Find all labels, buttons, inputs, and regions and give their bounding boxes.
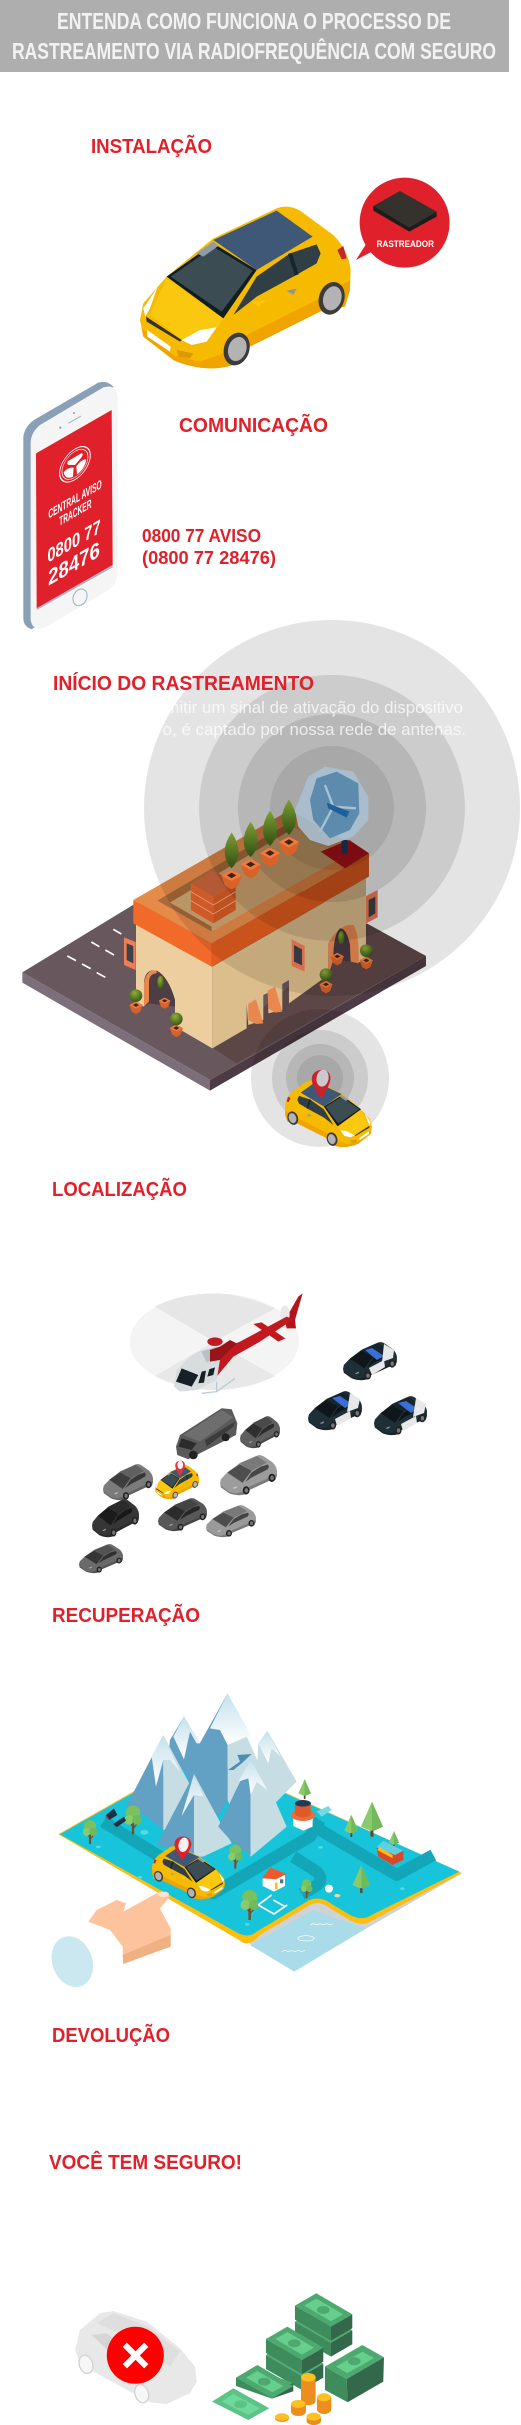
illustration: money and coins <box>212 2293 384 2425</box>
illustration: smartphone <box>23 382 118 629</box>
illustration: smartphone: 28476 <box>48 537 100 591</box>
heading: início do rastreamento: INÍCIO DO RASTREAMENTO <box>53 672 314 695</box>
phone number <box>142 526 276 568</box>
icon: red x <box>107 2327 164 2384</box>
rooftop vent <box>191 883 213 923</box>
roof <box>133 900 212 967</box>
callout: rastreador device <box>356 178 450 268</box>
map pin <box>175 1836 191 1860</box>
illustration: smartphone: 0800 77 <box>47 516 101 568</box>
heading: comunicação: COMUNICAÇÃO <box>179 414 328 437</box>
illustration: building with road <box>22 810 426 1091</box>
heading: devolução: DEVOLUÇÃO <box>52 2024 170 2047</box>
illustration: rooftop plants and antenna dish <box>221 767 369 889</box>
hand <box>45 1892 171 1993</box>
illustration: tracked car in traffic <box>155 1461 199 1499</box>
header banner <box>0 0 509 72</box>
illustration: tracked yellow car <box>285 1069 372 1147</box>
map car <box>152 1846 225 1899</box>
illustration: smartphone: TRACKER <box>59 496 92 529</box>
illustration: helicopter <box>130 1293 303 1393</box>
map buildings <box>105 1800 403 1914</box>
body text: white text over rings: mitir um sinal de ativação do dispositivo <box>165 698 463 717</box>
phone number: 0800 77 AVISO <box>142 526 261 546</box>
wall signs <box>124 937 136 970</box>
illustration: faded car <box>75 2311 197 2405</box>
body text: white text over rings: o, é captado por nossa rede de antenas. <box>163 720 466 739</box>
illustration: smartphone: CENTRAL AVISO <box>48 477 102 521</box>
heading: instalação: INSTALAÇÃO <box>91 135 212 158</box>
signal rings: antenna <box>144 620 520 996</box>
map land <box>58 1754 462 1943</box>
map water <box>250 1910 367 1972</box>
heading: recuperação: RECUPERAÇÃO <box>52 1604 200 1627</box>
illustration: traffic cars <box>79 1416 280 1573</box>
map water waves <box>282 1924 333 1952</box>
potted plants <box>129 931 373 1037</box>
illustration: police cars <box>308 1342 427 1435</box>
heading: localização: LOCALIZAÇÃO <box>52 1178 187 1201</box>
mountains <box>126 1693 297 1857</box>
phone number: (0800 77 28476) <box>142 548 276 568</box>
heading: você tem seguro: VOCÊ TEM SEGURO! <box>49 2150 242 2174</box>
illustration: yellow car <box>140 207 351 369</box>
illustration: van <box>176 1408 237 1459</box>
phone logo <box>60 440 90 489</box>
body text: white text over rings <box>163 698 466 739</box>
map trees <box>83 1779 399 1920</box>
signal rings: car <box>251 1009 389 1147</box>
illustration: isometric map <box>45 1693 462 1993</box>
callout: rastreador device: RASTREADOR <box>377 239 434 249</box>
